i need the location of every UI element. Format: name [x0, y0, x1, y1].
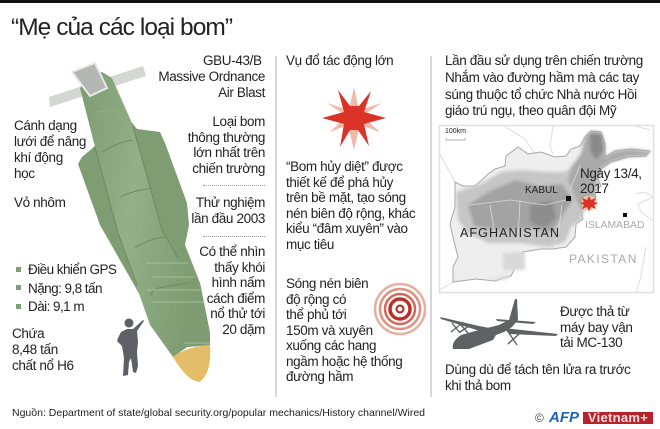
label: mushroom cloud: nổ thử tới: [210, 306, 265, 321]
plane caption: tải MC-130: [560, 335, 622, 350]
shockwave description: ngầm hoặc hệ thống: [286, 354, 402, 369]
spec list: [16, 262, 116, 314]
title: “Mẹ của các loại bom”: [11, 14, 232, 41]
parachute caption: khi thả bom: [445, 378, 511, 392]
shockwave description: thể phủ tới: [286, 307, 346, 322]
label: mushroom cloud: [199, 244, 265, 337]
shockwave description: [286, 276, 402, 384]
AFP Vietnam+ logo: AFP: [549, 409, 579, 426]
label: mushroom cloud: cách điểm: [207, 291, 265, 306]
dotted dividers: [203, 185, 265, 186]
spec list: Dài: 9,1 m: [28, 299, 84, 314]
marker: Islamabad: [623, 213, 627, 217]
label: largest conventional bomb: [188, 114, 265, 176]
label: first test: lần đầu 2003: [191, 211, 265, 226]
label: aluminium shell: Vỏ nhôm: [14, 195, 65, 210]
label: explosive charge: [12, 326, 74, 373]
icon: soldier: [117, 318, 144, 376]
icon: strike star: [582, 196, 596, 210]
plane caption: [560, 304, 632, 350]
label: explosive charge: chất nổ H6: [12, 358, 74, 373]
label: first test: [191, 195, 265, 226]
label: mushroom cloud: thấy khói: [214, 260, 265, 275]
label: mushroom cloud: hình nấm: [212, 275, 265, 290]
label: wings: khí động: [14, 150, 63, 165]
column divider left: [275, 56, 277, 397]
shockwave description: 150m và xuyên: [286, 323, 373, 338]
blast description: nén biên độ rộng, khác: [286, 206, 415, 221]
blast description: “Bom hủy diệt” được: [286, 159, 403, 174]
Afghanistan country shape: [450, 131, 650, 282]
blast description: trên bề mặt, tạo sóng: [286, 190, 406, 205]
target description: giáo trú ngụ, theo quân đội Mỹ: [445, 103, 616, 118]
plane caption: Được thả từ: [560, 304, 629, 319]
label: explosive charge: 8,48 tấn: [12, 342, 58, 357]
parachute caption: [445, 362, 630, 392]
label: largest conventional bomb: Loại bom: [212, 114, 265, 129]
label: wings: [14, 118, 86, 181]
map label: Islamabad: ISLAMABAD: [585, 220, 644, 231]
shockwave description: đường hầm: [286, 369, 353, 384]
parachute caption: Dùng dù để tách tên lửa ra trước: [445, 362, 630, 377]
bomb name label: [158, 53, 266, 100]
bomb name label: GBU-43/B: [203, 53, 262, 68]
top black bar: [0, 0, 660, 3]
label: largest conventional bomb: chiến trường: [192, 161, 265, 176]
spec list: Nặng: 9,8 tấn: [28, 280, 102, 296]
label: mushroom cloud: Có thể nhìn: [199, 244, 265, 259]
bomb illustration: [49, 62, 210, 382]
target description: Nhắm vào đường hầm mà các tay: [445, 70, 639, 85]
marker: Kabul: [566, 196, 571, 201]
target description: [445, 70, 640, 118]
label: first test: Thử nghiệm: [196, 195, 265, 210]
map label: Afghanistan: AFGHANISTAN: [460, 226, 560, 240]
bomb name label: Massive Ordnance: [158, 69, 265, 84]
spec list: Điều khiển GPS: [28, 262, 116, 277]
map label: Pakistan: PAKISTAN: [569, 252, 638, 266]
AFP Vietnam+ logo: ©: [535, 411, 544, 425]
blast description: mục tiêu: [286, 237, 334, 252]
label: explosive charge: Chứa: [12, 326, 44, 341]
label: wings: Cánh dạng: [14, 118, 77, 133]
bomb name label: Air Blast: [218, 85, 265, 100]
map label: Kabul: KABUL: [525, 185, 558, 196]
blast description: thiết kế để phá hủy: [286, 175, 393, 190]
heading: large impact blast: Vụ đổ tác động lớn: [286, 53, 393, 68]
map label: date: Ngày 13/4,: [580, 166, 642, 181]
label: wings: học: [14, 166, 35, 181]
label: largest conventional bomb: lớn nhất trên: [193, 145, 265, 160]
shockwave description: độ rộng có: [286, 292, 346, 307]
blast description: [286, 159, 416, 252]
AFP Vietnam+ logo: Vietnam+: [588, 410, 648, 425]
map label: date: 2017: [580, 180, 609, 196]
plane caption: máy bay vận: [560, 320, 632, 334]
first use heading: Lần đầu sử dụng trên chiến trường: [445, 53, 643, 68]
shockwave description: Sóng nén biên: [286, 276, 368, 291]
target description: súng thuộc tổ chức Nhà nước Hồi: [445, 86, 637, 102]
label: largest conventional bomb: thông thường: [188, 130, 265, 145]
AFP Vietnam+ logo: [535, 409, 653, 426]
label: wings: lưới để nâng: [14, 134, 86, 149]
column divider right: [430, 56, 432, 397]
map label: date: [580, 166, 642, 196]
source line: Nguồn: Department of state/global security.org/popular mechanics/History channel/Wired: [12, 407, 425, 419]
blast description: kiểu “đâm xuyên” vào: [286, 221, 408, 236]
shockwave description: xuống các hang: [286, 338, 376, 353]
map scale: 100km: [445, 128, 466, 135]
label: mushroom cloud: 20 dặm: [222, 322, 265, 337]
